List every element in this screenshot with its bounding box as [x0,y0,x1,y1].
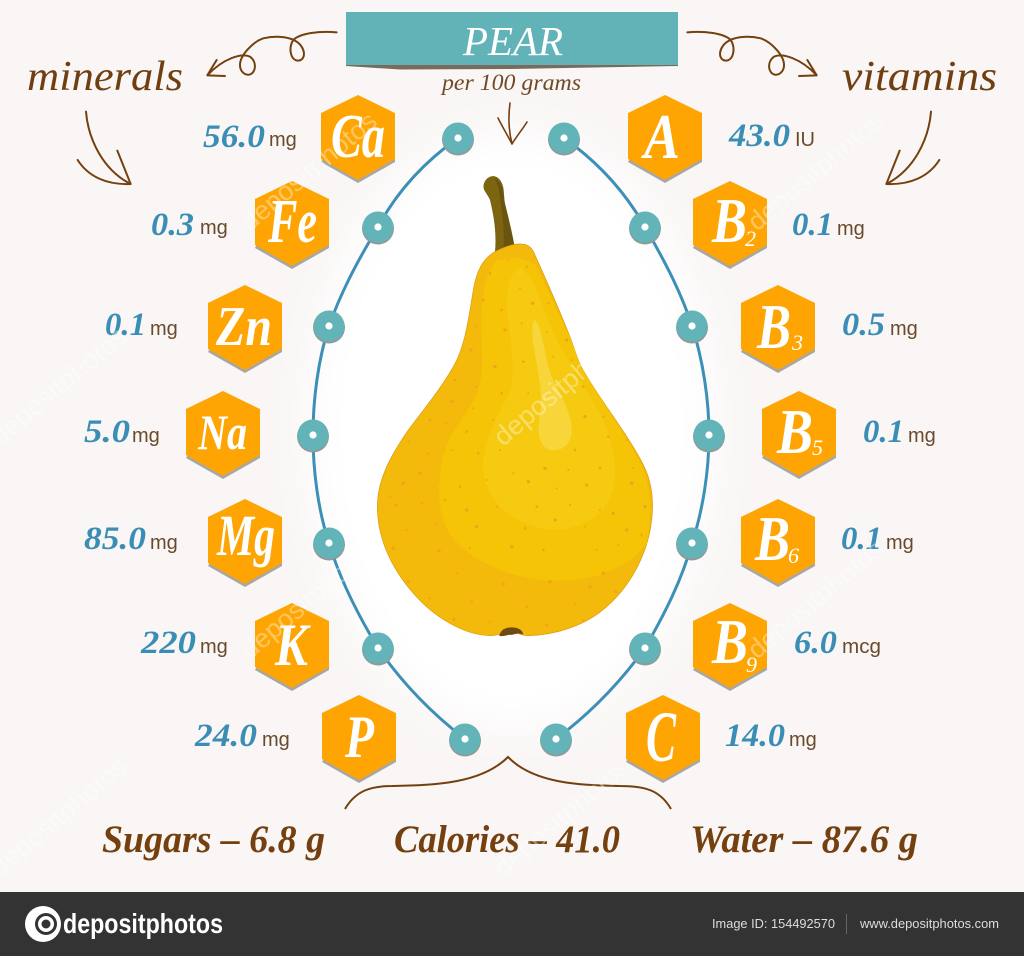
stat: calories: Calories – 41.0 [394,818,620,861]
footer bar: www.depositphotos.com [859,916,999,931]
mineral: Na: mg [132,425,160,447]
vitamin: B6: B [754,503,790,574]
watermark: depositphotos [742,106,890,237]
mineral: Na: 5.0 [84,414,130,450]
vitamin: B6: mg [886,532,914,554]
mineral: Zn: mg [150,318,178,340]
watermark: depositphotos [488,752,636,883]
vitamin: B3: B [756,291,791,362]
arrow: minerals down [78,112,131,184]
subtitle: per 100 grams [440,70,581,95]
mineral: Mg: 85.0 [84,521,146,557]
vitamin: A: A [641,101,680,172]
mineral: P: 24.0 [194,718,257,754]
arrow: vitamins down [886,112,939,184]
mineral: Zn: 0.1 [105,307,146,343]
title banner [346,12,678,70]
mineral: K: mg [200,636,228,658]
vitamin: C: C [646,697,677,777]
footer bar: Image ID: 154492570 [712,916,835,931]
vitamin: B3: 3 [791,330,803,355]
mineral: Mg [84,499,282,587]
vitamin: B3 [741,285,918,373]
vitamin: B5: mg [908,425,936,447]
vitamin: B9: B [711,606,748,677]
footer bar [0,892,1024,956]
vitamin: C: 14.0 [725,718,785,754]
mineral: Zn: Zn [215,296,272,358]
stat: water: Water – 87.6 g [690,818,918,861]
watermark [0,106,890,883]
stat: sugars: Sugars – 6.8 g [102,818,325,861]
pear illustration [377,176,653,636]
vitamin: C: mg [789,729,817,751]
footer bar: depositphotos [63,908,223,939]
footer logo icon [25,906,61,942]
mineral: Ca: mg [269,129,297,151]
vitamin: B9: 6.0 [794,625,837,661]
mineral: Ca [203,95,395,183]
watermark: depositphotos [235,534,383,665]
vitamin: A: IU [795,129,815,151]
mineral: Fe [151,181,329,269]
vitamin: B5 [762,391,936,479]
heading: minerals: minerals [27,54,183,100]
mineral: K: K [274,612,311,678]
vitamin: B2 [693,181,865,269]
mineral: K [140,603,329,691]
mineral: Na [84,391,260,479]
watermark: depositphotos [742,534,890,665]
vitamin: B9: mcg [842,636,881,658]
vitamin: B6 [741,499,914,587]
vitamin: B6: 0.1 [841,521,882,557]
watermark: depositphotos [235,106,383,237]
mineral: Ca: Ca [331,103,385,171]
mineral: Fe: Fe [267,188,317,256]
vitamin: C [626,695,817,783]
vitamin: B5: 0.1 [863,414,904,450]
arrow: curl to minerals [207,32,337,76]
vitamin: B9 [693,603,881,691]
mineral: P: mg [262,729,290,751]
vitamin: A: 43.0 [728,118,790,154]
arrow: centre down [498,103,527,144]
mineral: Ca: 56.0 [203,119,265,155]
vitamin: B2: 2 [745,226,756,251]
vitamin: B3: mg [890,318,918,340]
brace [345,757,671,809]
vitamin: B2: B [711,185,747,256]
vitamin: B9: 9 [746,652,757,677]
mineral: Fe: mg [200,217,228,239]
vitamin: B5: 5 [812,435,823,460]
mineral: Na: Na [197,404,247,460]
mineral: P [194,695,396,783]
arrow: curl to vitamins [687,32,817,76]
watermark: depositphotos [488,321,636,452]
mineral: Zn [105,285,282,373]
vitamin: A [628,95,815,183]
connector dots [297,122,725,756]
title banner: PEAR [462,18,563,64]
vitamin: B2: 0.1 [792,207,833,243]
mineral: Mg: Mg [216,503,275,568]
mineral: P: P [344,704,375,770]
mineral: Fe: 0.3 [151,207,194,243]
vitamin: B3: 0.5 [842,307,885,343]
vitamin: B2: mg [837,218,865,240]
heading: vitamins: vitamins [842,54,997,100]
oval connector: left [313,138,465,739]
vitamin: B5: B [776,396,813,467]
mineral: K: 220 [140,625,196,661]
vitamin: B6: 6 [788,543,799,568]
oval connector: right [556,138,709,739]
mineral: Mg: mg [150,532,178,554]
